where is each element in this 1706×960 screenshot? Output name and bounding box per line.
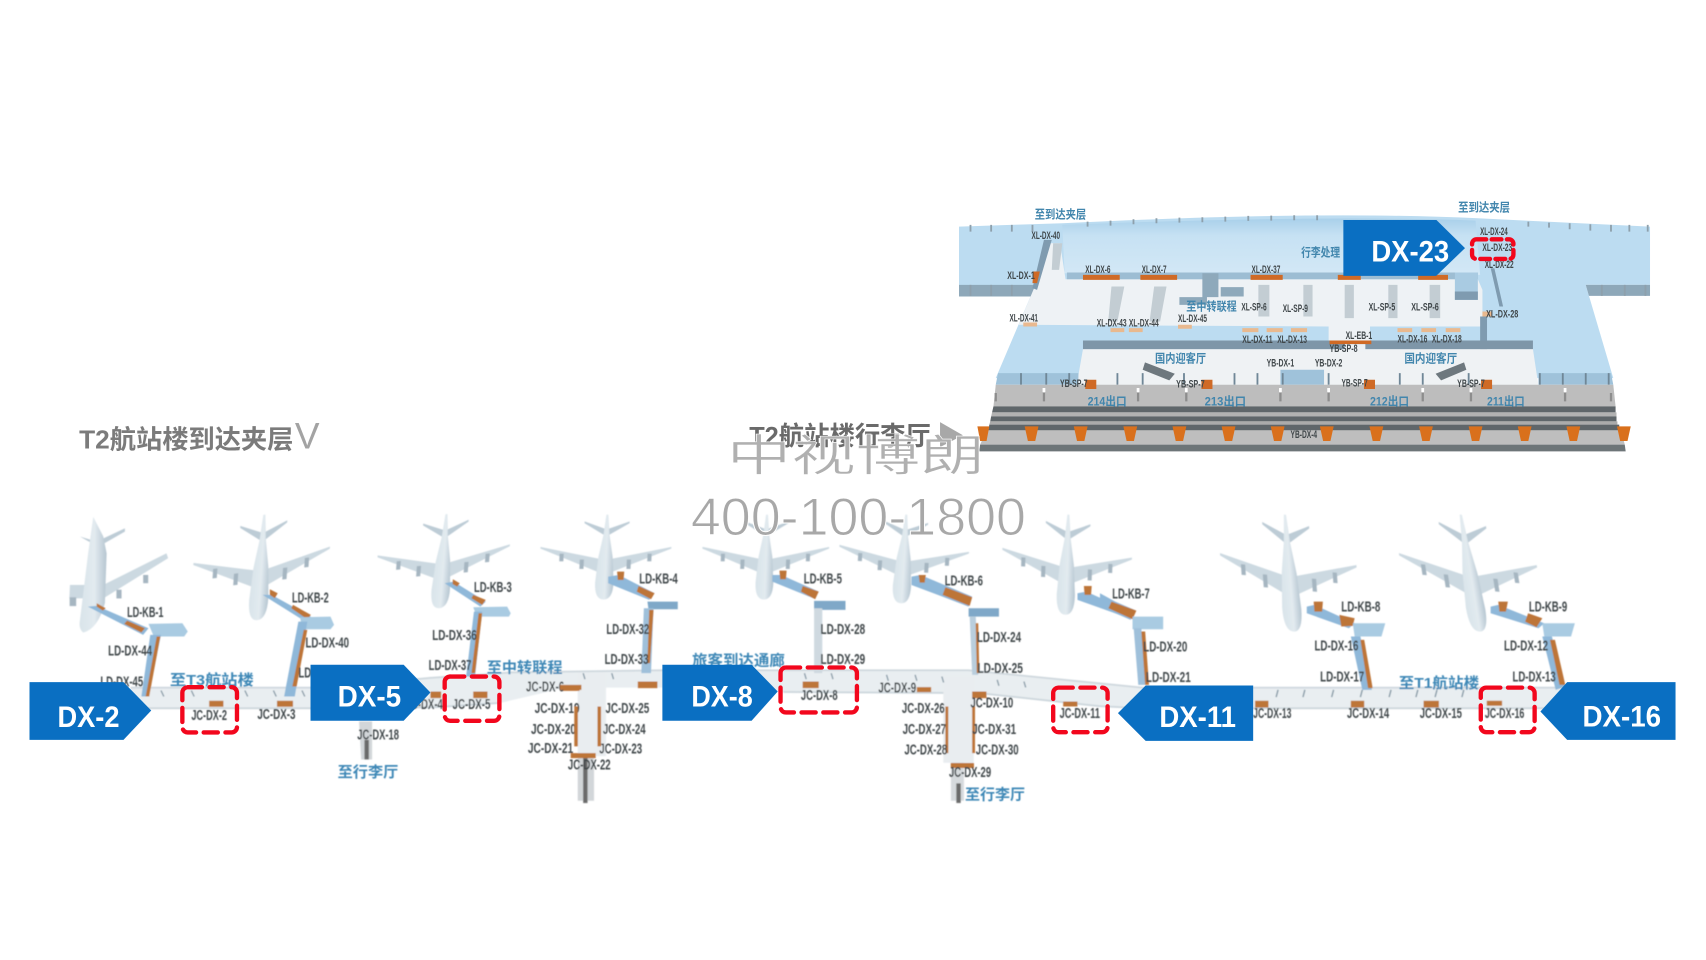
section labels: LD-DX-13 [1512, 669, 1556, 685]
section labels: JC-DX-18 [357, 727, 399, 744]
panel: T2 arrival mezzanine map [69, 506, 1575, 804]
callout: DX-16: DX-16 [1583, 700, 1661, 733]
highlight box: JC-DX-2 [182, 687, 237, 732]
section labels: JC-DX-3 [257, 707, 296, 723]
section labels: LD-KB-1 [127, 605, 164, 621]
map labels: XL-DX-22 [1485, 258, 1514, 271]
plane 3 [373, 509, 513, 614]
map labels: XL-DX-16 [1397, 332, 1428, 345]
watermark [691, 433, 1026, 547]
map labels: XL-DX-18 [1432, 332, 1462, 345]
section labels: LD-DX-37 [429, 657, 471, 674]
corridor ticks [1276, 690, 1464, 697]
section labels: LD-DX-40 [306, 635, 349, 651]
glass block base [1455, 292, 1478, 300]
corridor orange counters [560, 681, 1077, 768]
left pier orange [1032, 272, 1040, 283]
section labels: LD-DX-28 [821, 622, 865, 638]
callout: DX-11 [1118, 685, 1253, 741]
section labels: LD-KB-9 [1529, 600, 1567, 615]
map labels: 国内迎客厅 [1404, 351, 1457, 366]
section labels: 旅客到达通廊 [692, 652, 785, 669]
highlight box: XL-DX-23 [1472, 239, 1513, 259]
left T-branch pier [578, 672, 606, 756]
highlight box: JC-DX-11 [1053, 688, 1108, 732]
lower hall top band [1083, 340, 1533, 349]
section labels: LD-DX-44 [108, 643, 152, 659]
map labels: XL-DX-45 [1178, 312, 1207, 325]
map labels: XL-SP-6 [1241, 301, 1267, 313]
plane 8 [1217, 509, 1362, 638]
road lanes [992, 406, 1616, 412]
plane 9 [1392, 509, 1548, 638]
watermark: 400-100-1800 [691, 488, 1026, 547]
jet bridge 1 [88, 603, 188, 696]
section labels: LD-DX-17 [1320, 669, 1364, 685]
concourse gate bands [1067, 273, 1478, 279]
section labels [1112, 586, 1567, 722]
map labels: XL-EB-1 [1346, 329, 1372, 342]
front posts [1021, 373, 1609, 385]
plane 1 [69, 517, 168, 633]
map labels: 至中转联程 [1186, 300, 1237, 314]
section labels: JC-DX-14 [1347, 706, 1389, 722]
highlight box: JC-DX-8 [781, 667, 857, 712]
road lane five [988, 425, 1619, 430]
forecourt pavement [980, 430, 1625, 445]
section labels: JC-DX-16 [1485, 706, 1524, 722]
forecourt edge [979, 445, 1626, 451]
map labels: XL-DX-13 [1277, 333, 1307, 346]
right pier stem core [956, 783, 961, 803]
jet bridge 7 outer part [1077, 586, 1120, 615]
callout: DX-11: DX-11 [1159, 701, 1236, 734]
map labels: XL-DX-44 [1129, 317, 1159, 329]
jet bridge 6 [912, 575, 999, 675]
map labels: XL-DX-1 [1007, 269, 1035, 282]
glass block at right end [1455, 273, 1478, 300]
concourse piers [1052, 243, 1440, 321]
terminal apron and roof base [959, 215, 1650, 378]
section labels: JC-DX-25 [605, 701, 650, 717]
section labels: 至中转联程 [487, 660, 562, 676]
lower arrivals hall [1077, 349, 1538, 386]
heading: baggage hall: T2航站楼行李厅 [749, 421, 931, 451]
jet bridge 3 [445, 579, 511, 676]
plane 2 [189, 506, 333, 628]
section labels: JC-DX-4 [405, 697, 443, 713]
centre section: jet bridges and labels [560, 571, 1120, 804]
map labels: 212出口 [1370, 395, 1409, 409]
concourse bay blocks [1179, 273, 1244, 305]
section labels: 至T3航站楼 [170, 671, 254, 689]
map labels: YB-SP-7 [1341, 376, 1368, 389]
heading: arrival mezzanine: T2航站楼到达夹层 [79, 424, 293, 454]
section labels: JC-DX-27 [903, 722, 946, 738]
highlight box: JC-DX-5 [445, 677, 499, 721]
upper concourse floor [1019, 243, 1482, 342]
plane 4 [538, 515, 673, 599]
section labels: JC-DX-26 [902, 701, 945, 717]
section labels: LD-KB-3 [474, 579, 512, 596]
map labels: YB-SP-7 [1176, 377, 1205, 390]
map labels: 国内迎客厅 [1155, 351, 1206, 366]
map labels: 至到达夹层 [1458, 201, 1510, 215]
section labels: JC-DX-23 [599, 741, 642, 758]
kerb white dots [1044, 388, 1565, 392]
jet bridge 5 [772, 571, 845, 673]
section labels: JC-DX-10 [970, 695, 1013, 711]
corridor top edge [131, 670, 1567, 688]
pier edges [1032, 240, 1503, 350]
section labels: LD-DX-16 [1314, 638, 1359, 654]
section labels: 至行李厅 [338, 764, 398, 781]
map labels: 211出口 [1487, 395, 1525, 409]
section labels: JC-DX-22 [568, 757, 611, 774]
inner hall light-blue area [1062, 219, 1480, 275]
map labels: XL-DX-28 [1486, 308, 1518, 320]
section labels: LD-DX-45 [100, 674, 143, 690]
section labels: JC-DX-15 [1420, 706, 1462, 722]
plane 6 [836, 511, 971, 607]
map labels: 214出口 [1088, 395, 1127, 409]
door orange markers [1085, 380, 1492, 389]
icon: right marker [940, 422, 963, 447]
callout: DX-5 [311, 665, 430, 721]
map labels: XL-DX-11 [1242, 333, 1273, 346]
corridor ticks [583, 673, 1026, 687]
map labels: XL-SP-6 [1411, 301, 1439, 313]
section labels: 至行李厅 [965, 786, 1025, 804]
kerb posts [996, 393, 1611, 401]
highlight box: JC-DX-16 [1481, 688, 1535, 732]
callout: DX-2 [29, 682, 151, 740]
stub end [364, 740, 369, 759]
section labels: JC-DX-19 [535, 701, 580, 717]
map labels: XL-DX-37 [1251, 263, 1280, 276]
map labels: YB-DX-2 [1315, 356, 1343, 369]
map labels: XL-SP-5 [1369, 301, 1395, 313]
callout: DX-23: DX-23 [1371, 236, 1449, 269]
section labels: JC-DX-5 [453, 697, 491, 713]
callout: DX-16 [1540, 682, 1676, 740]
jet bridge 8 [1307, 602, 1385, 690]
section labels: LD-DX-36 [432, 627, 477, 644]
roof post ticks [970, 215, 1648, 296]
jet bridge 4 [608, 572, 678, 673]
callout: DX-23 [1343, 220, 1465, 276]
section labels: LD-DX-29 [821, 651, 865, 668]
left section: jet bridges and labels [88, 579, 580, 781]
map labels: XL-SP-9 [1283, 302, 1308, 315]
section labels [100, 579, 580, 781]
JC-DX-18 stub [359, 721, 372, 759]
section labels: JC-DX-6 [526, 679, 564, 695]
section labels: JC-DX-28 [904, 742, 947, 759]
road lane four [989, 421, 1617, 425]
corridor orange counters [209, 686, 580, 707]
plane 7 [1000, 510, 1133, 620]
icon: down marker: V [295, 415, 320, 456]
forecourt bollards [977, 426, 1631, 441]
centre connector [1330, 326, 1370, 351]
front glazing blue strip [996, 370, 1613, 385]
map labels: XL-DX-7 [1142, 263, 1167, 276]
left escalator [1143, 362, 1175, 380]
left pier stem [578, 756, 594, 801]
map labels: 213出口 [1205, 395, 1246, 409]
map labels: XL-DX-41 [1010, 312, 1038, 324]
section labels: LD-DX-20 [1143, 639, 1187, 655]
section labels: JC-DX-13 [1253, 706, 1292, 722]
section labels: JC-DX-11 [1060, 706, 1100, 722]
curbside road [993, 385, 1616, 406]
road lane three [990, 416, 1616, 421]
right escalator [1436, 362, 1466, 380]
map labels: YB-DX-4 [1291, 428, 1317, 440]
centre orange strip [1330, 340, 1371, 344]
section labels: JC-DX-2 [191, 707, 227, 724]
callout: DX-2: DX-2 [57, 701, 119, 734]
section labels: JC-DX-24 [603, 722, 646, 738]
callout: DX-8: DX-8 [691, 680, 753, 713]
section labels: 至T1航站楼 [1399, 674, 1479, 692]
section labels: JC-DX-8 [801, 687, 838, 704]
corridor ticks [161, 690, 305, 696]
section labels: LD-KB-5 [804, 571, 842, 587]
jet bridge 9 [1491, 602, 1575, 690]
right T-branch pier [943, 677, 974, 763]
callout: DX-5: DX-5 [338, 680, 401, 713]
section labels: LD-KB-7 [1112, 586, 1150, 602]
left pier stem core [583, 756, 588, 803]
section labels: LD-DX-32 [606, 621, 649, 638]
section labels: JC-DX-30 [976, 742, 1019, 759]
section labels: LD-KB-8 [1341, 600, 1380, 615]
map labels: XL-DX-23 [1482, 241, 1512, 253]
section labels: LD-DX-21 [1146, 670, 1191, 686]
section labels: LD-KB-4 [639, 571, 678, 587]
map labels: YB-DX-1 [1267, 356, 1294, 369]
arrival gate counters [1083, 275, 1448, 280]
panel: T2 baggage hall floor map [959, 201, 1650, 451]
road lane two [991, 412, 1616, 416]
section labels: JC-DX-20 [531, 722, 576, 738]
section labels: JC-DX-21 [528, 741, 574, 757]
map labels [1007, 201, 1525, 440]
map labels: YB-SP-8 [1330, 342, 1358, 355]
watermark: 中视博朗 [727, 433, 985, 481]
section labels: LD-DX-33 [605, 651, 649, 668]
section labels: JC-DX-29 [949, 765, 991, 781]
callout: DX-8 [662, 665, 778, 721]
map labels: YB-SP-7 [1060, 377, 1088, 390]
map labels: XL-DX-24 [1480, 225, 1508, 237]
section labels: LD-DX-24 [977, 630, 1021, 646]
map labels: 至到达夹层 [1035, 207, 1086, 222]
section labels: LD-DX-41 [298, 665, 342, 681]
section labels [568, 571, 1100, 804]
plane 5 [700, 515, 830, 599]
map labels: XL-DX-43 [1097, 317, 1127, 329]
section labels: LD-DX-25 [978, 661, 1023, 677]
section labels: LD-DX-12 [1504, 638, 1548, 654]
pale counters [1023, 311, 1492, 332]
section labels: JC-DX-9 [878, 680, 916, 696]
map labels: XL-DX-6 [1085, 263, 1111, 276]
right pier stem [951, 763, 964, 801]
section labels: LD-KB-6 [945, 573, 983, 589]
section labels: JC-DX-31 [972, 722, 1016, 738]
map labels: 行李处理 [1301, 245, 1340, 260]
map labels: XL-DX-40 [1032, 229, 1060, 242]
corridor orange counters [1255, 701, 1502, 707]
jet bridge 7 inner part [1100, 593, 1163, 685]
jet bridge 2 [263, 589, 334, 696]
right section: jet bridges and labels [1100, 586, 1575, 722]
map labels: YB-SP-7 [1457, 377, 1485, 390]
corridor lower edge [131, 692, 1567, 708]
main arrival corridor [131, 670, 1567, 708]
wing edge strips [959, 285, 1650, 297]
section labels: LD-KB-2 [292, 590, 329, 606]
